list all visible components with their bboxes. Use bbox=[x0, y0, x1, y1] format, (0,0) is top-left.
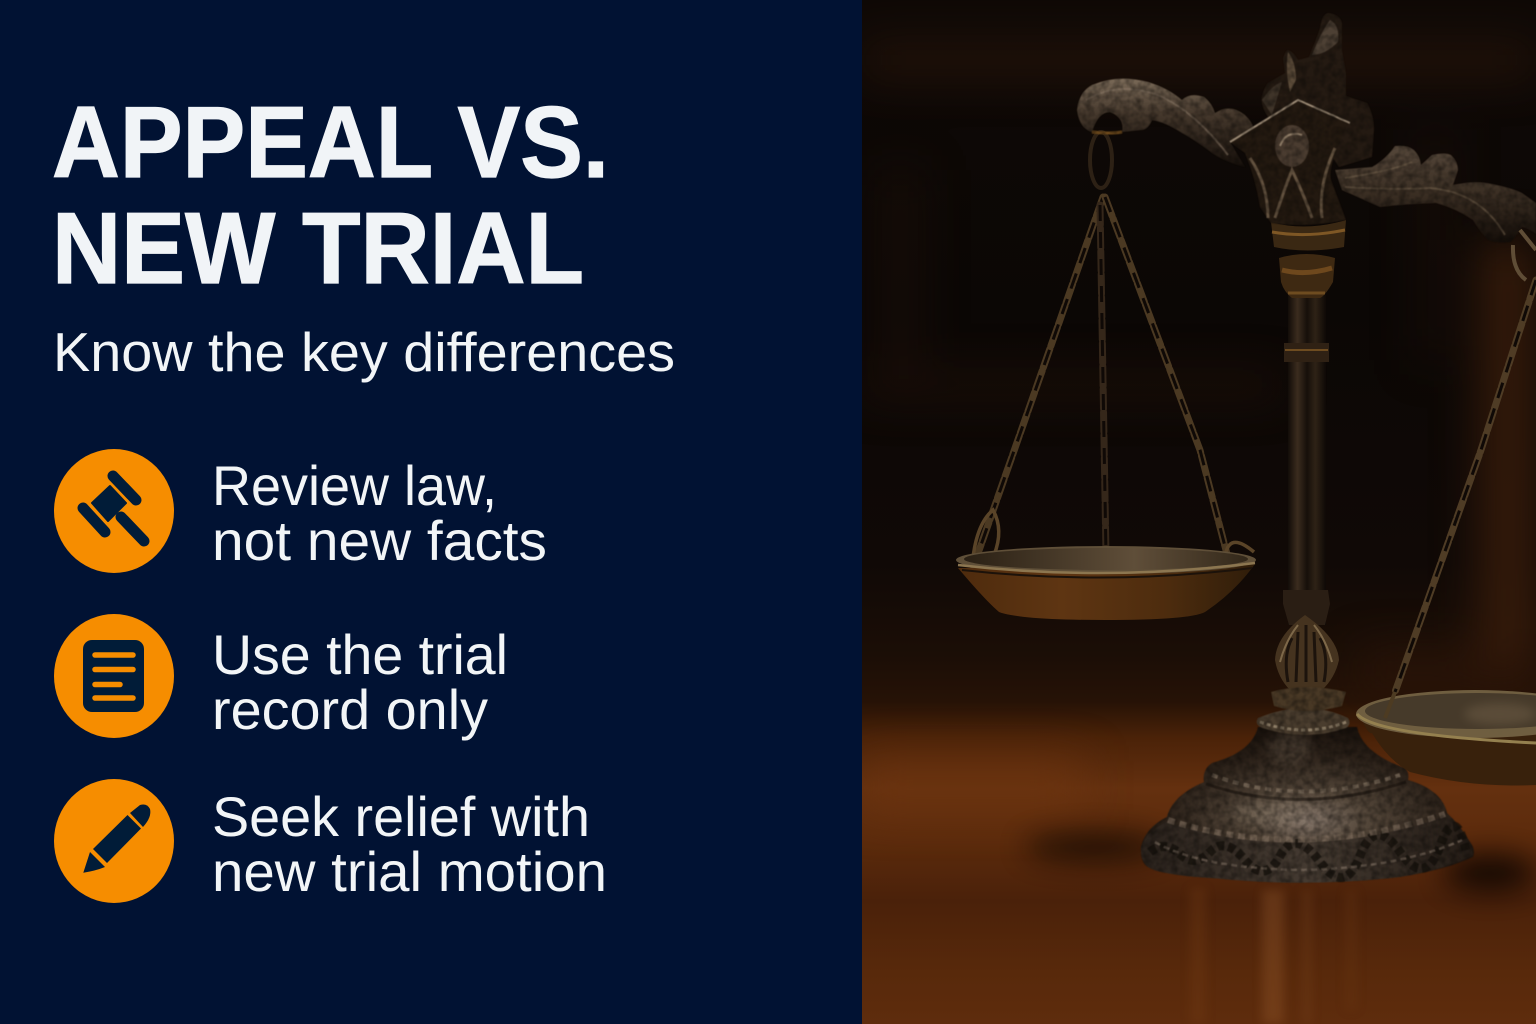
title: APPEAL VS. bbox=[52, 87, 609, 199]
list item: trial record bbox=[54, 614, 508, 741]
right chain bbox=[1395, 230, 1536, 692]
icon: pencil bbox=[54, 779, 174, 903]
list item: review law bbox=[54, 449, 547, 573]
table reflections bbox=[1192, 888, 1309, 1024]
list item: new trial motion bbox=[54, 779, 607, 903]
text: review law bbox=[212, 454, 547, 572]
blurred library background and table bbox=[862, 0, 1536, 1024]
icon: document bbox=[54, 614, 174, 738]
left chains bbox=[972, 132, 1254, 568]
column collars bbox=[1271, 220, 1346, 298]
text: trial record: Use the trial bbox=[212, 623, 508, 686]
text: new trial motion: new trial motion bbox=[212, 840, 607, 903]
panel: navy text panel bbox=[0, 0, 862, 1024]
left beam arm bbox=[1077, 79, 1253, 167]
left scale pan bbox=[956, 546, 1256, 620]
stand base bbox=[1141, 687, 1474, 883]
text: new trial motion: Seek relief with bbox=[212, 785, 590, 848]
acorn finial bbox=[1275, 615, 1339, 690]
icon: gavel bbox=[54, 449, 174, 573]
table shadows bbox=[1025, 833, 1165, 861]
text: trial record: record only bbox=[212, 678, 488, 741]
text: review law: not new facts bbox=[212, 509, 547, 572]
right beam arm bbox=[1335, 146, 1536, 243]
text: new trial motion bbox=[212, 785, 607, 903]
column bbox=[1283, 295, 1330, 625]
photo: bronze scales of justice on wooden table bbox=[862, 0, 1536, 1024]
title bbox=[52, 87, 609, 305]
subtitle: Know the key differences bbox=[53, 321, 675, 383]
title: NEW TRIAL bbox=[52, 193, 584, 305]
right scale pan bbox=[1356, 690, 1536, 785]
text: review law: Review law, bbox=[212, 454, 497, 517]
text: trial record bbox=[212, 623, 508, 741]
center ornament and finial bbox=[1230, 13, 1374, 225]
